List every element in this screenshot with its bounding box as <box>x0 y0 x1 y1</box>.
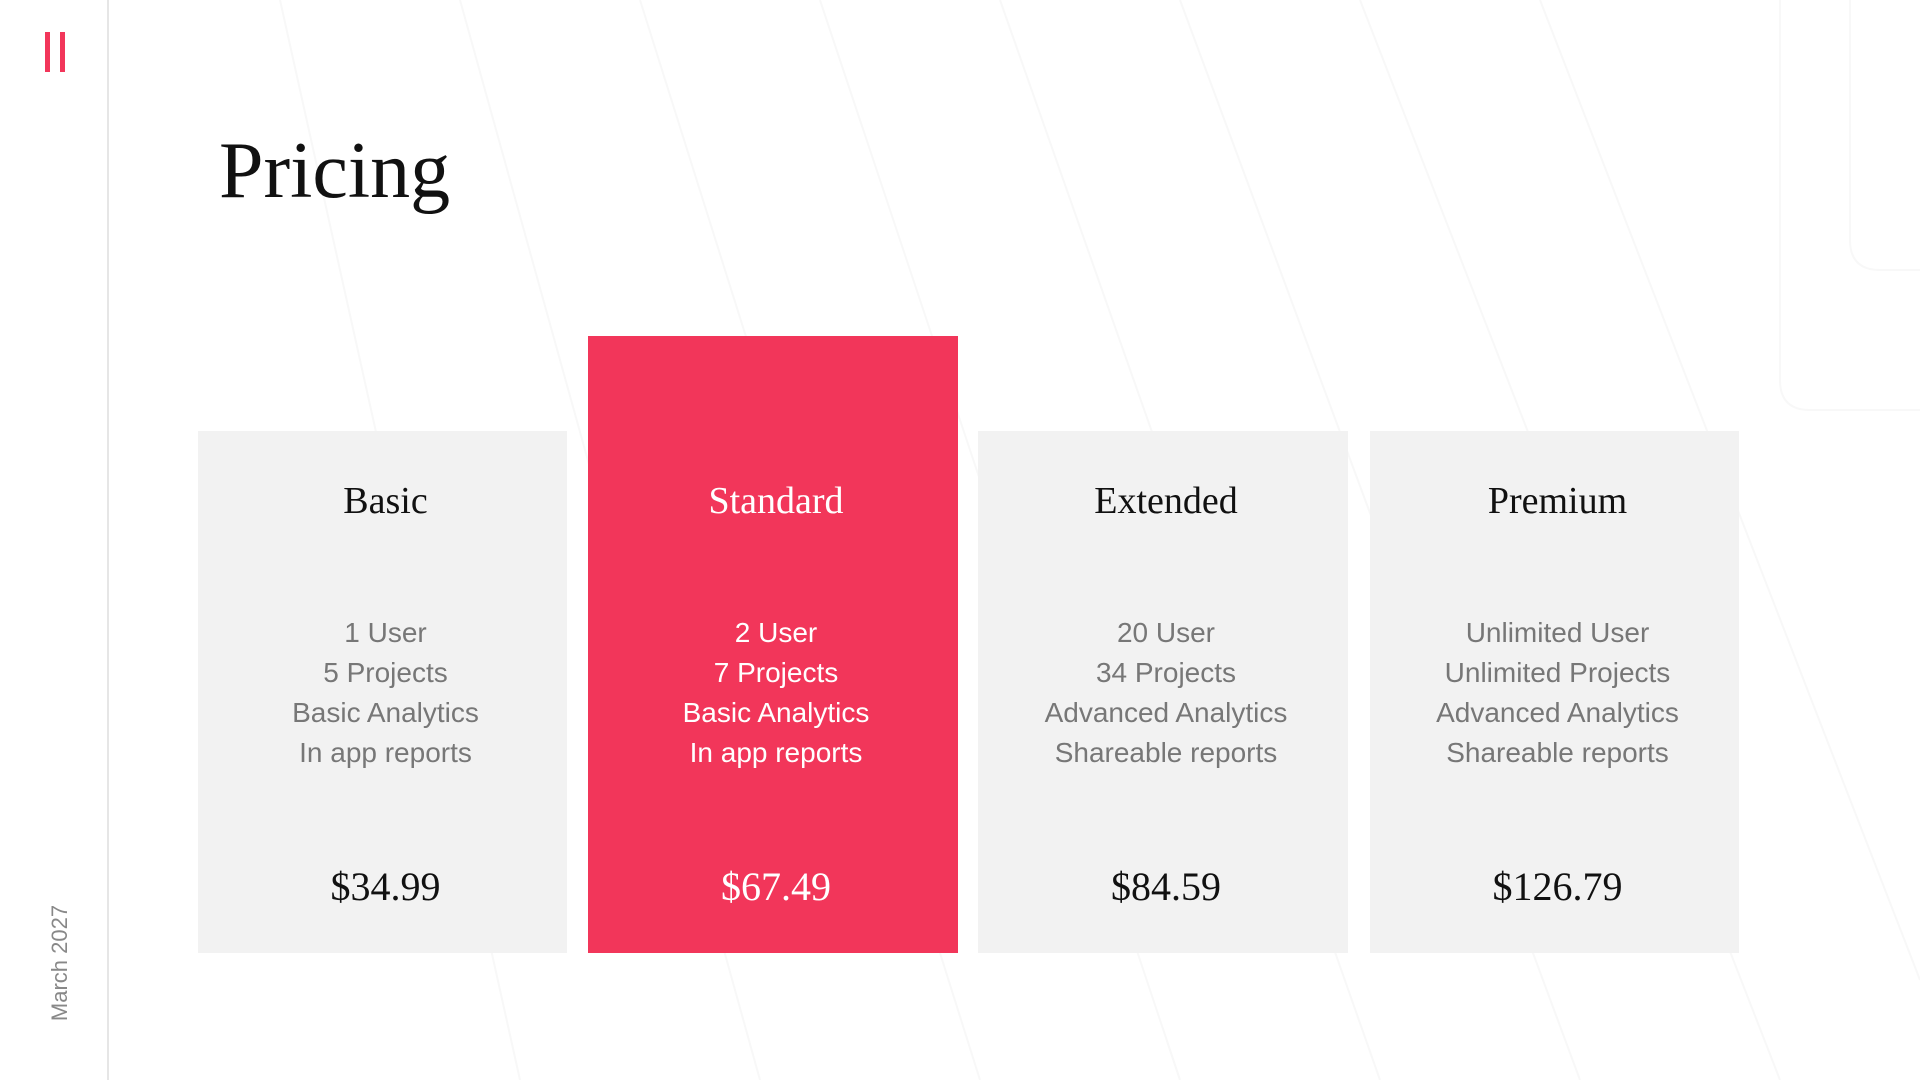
features: 7 Projects <box>714 657 838 688</box>
features: Basic Analytics <box>292 697 479 728</box>
features <box>1436 617 1679 768</box>
price: $67.49 <box>721 864 831 909</box>
features: Unlimited User <box>1466 617 1649 648</box>
features <box>1044 617 1287 768</box>
title: Pricing <box>219 127 450 215</box>
panel: Standard <box>588 336 958 953</box>
price: $126.79 <box>1492 864 1622 909</box>
price: $84.59 <box>1111 864 1221 909</box>
features: Advanced Analytics <box>1045 697 1287 728</box>
features: Advanced Analytics <box>1436 697 1679 728</box>
features: In app reports <box>299 737 472 768</box>
features: 1 User <box>344 617 427 648</box>
features <box>683 617 869 768</box>
icon: red double bars <box>45 32 65 72</box>
features: Unlimited Projects <box>1445 657 1670 688</box>
date label: March 2027 <box>47 905 72 1021</box>
features: 34 Projects <box>1096 657 1236 688</box>
card title: Standard <box>708 480 844 522</box>
panel: Extended <box>978 431 1348 953</box>
features <box>292 617 479 768</box>
features: Basic Analytics <box>683 697 869 728</box>
features: In app reports <box>690 737 862 768</box>
features: Shareable reports <box>1446 737 1669 768</box>
features: 2 User <box>735 617 817 648</box>
card title: Premium <box>1488 480 1627 522</box>
features: 5 Projects <box>323 657 448 688</box>
price: $34.99 <box>330 864 440 909</box>
card title: Basic <box>343 480 428 522</box>
card title: Extended <box>1094 480 1238 522</box>
sidebar divider <box>107 0 109 1080</box>
features: Shareable reports <box>1055 737 1277 768</box>
panel: Basic <box>198 431 567 953</box>
features: 20 User <box>1117 617 1215 648</box>
panel: Premium <box>1370 431 1739 953</box>
